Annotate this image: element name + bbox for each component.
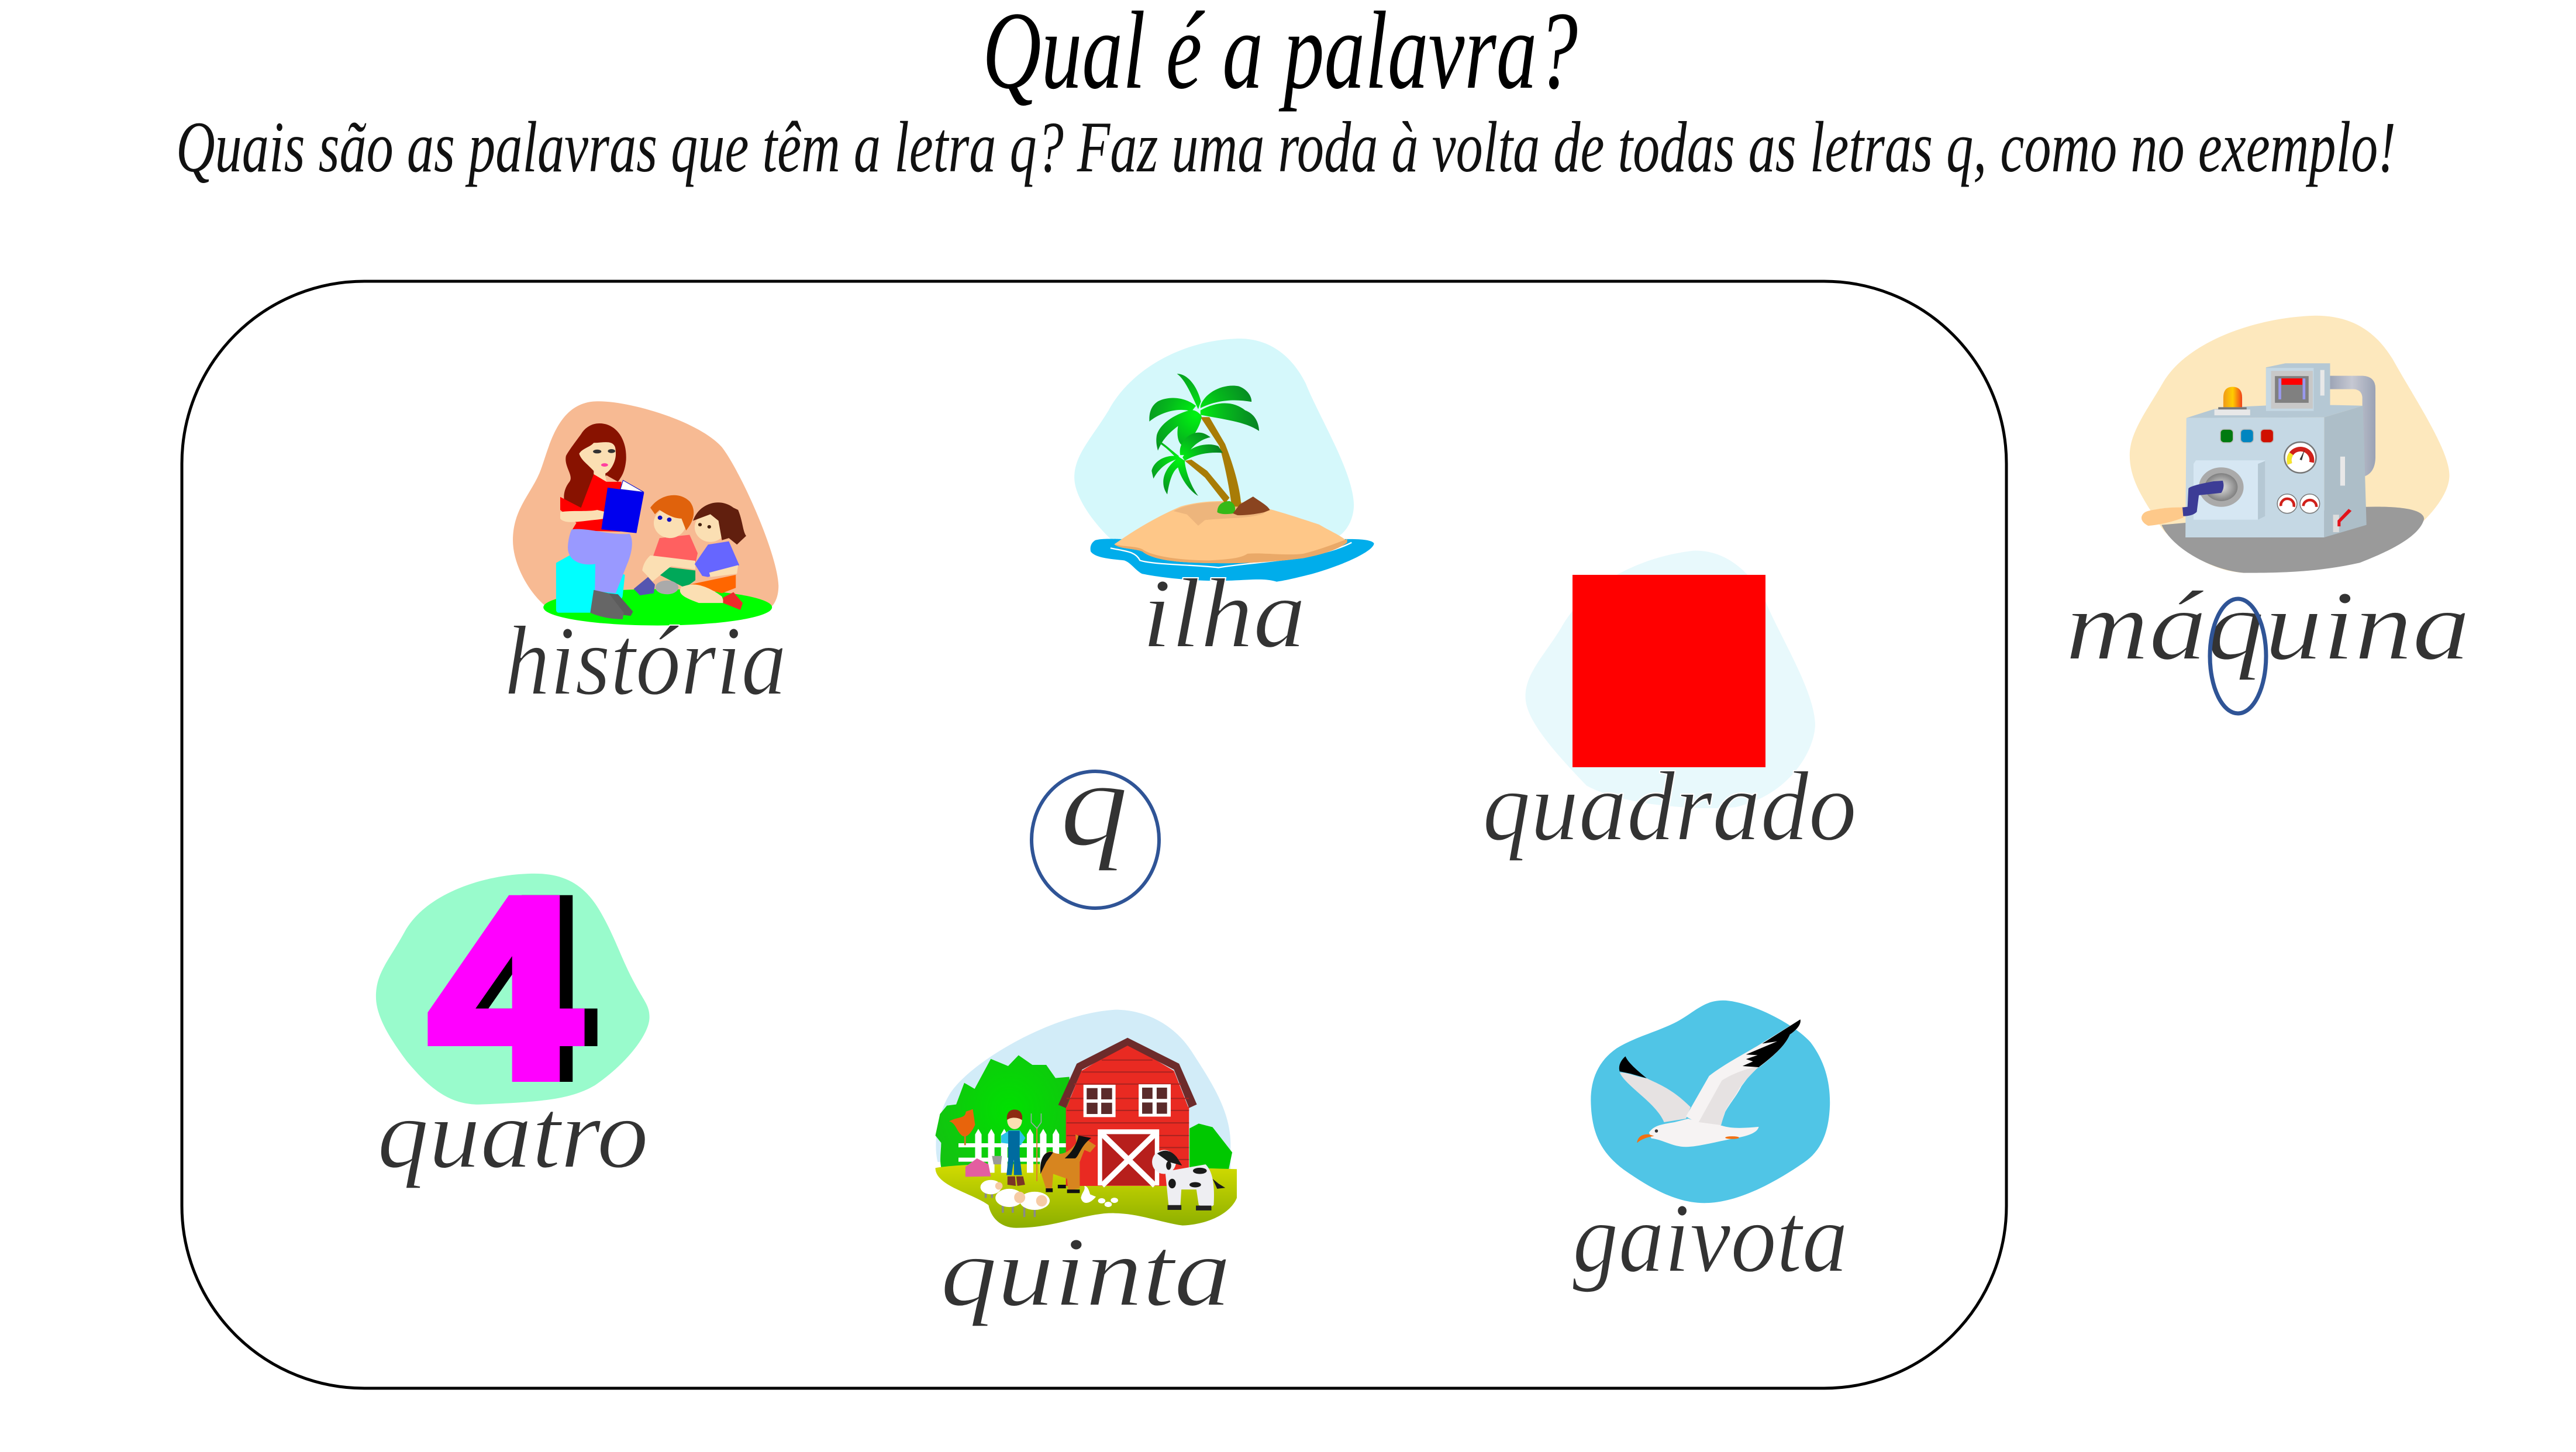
panel: word frame (182, 281, 2006, 1388)
item: ilha (1074, 339, 1374, 668)
word: quatro: quatro (377, 1079, 649, 1189)
centre letter q in circle (1032, 736, 1159, 908)
item: história (505, 401, 787, 716)
example ring around q (2210, 599, 2266, 713)
numeral 4 shadow: 4 (443, 846, 594, 1130)
circle (1032, 771, 1159, 908)
item: quatro (376, 846, 650, 1189)
word: quadrado: quadrado (1482, 751, 1857, 861)
background blob (1526, 551, 1815, 808)
red square (1573, 575, 1765, 767)
item: quadrado (1482, 551, 1857, 861)
word: máquina: máquina (2065, 571, 2470, 681)
word: história: história (505, 606, 787, 716)
illustration: teacher reading to children (513, 401, 778, 626)
word: ilha: ilha (1142, 558, 1306, 668)
illustration: machine (2130, 316, 2449, 573)
illustration: farm with barn (936, 1010, 1237, 1228)
word: quinta: quinta (940, 1217, 1231, 1327)
letter q: q (1060, 736, 1129, 872)
background blob (376, 874, 650, 1105)
item: quinta (936, 1010, 1237, 1327)
example: máquina (2065, 316, 2470, 713)
numeral 4: 4 (430, 846, 581, 1130)
word: gaivota: gaivota (1573, 1183, 1848, 1293)
item: gaivota (1573, 1001, 1848, 1293)
illustration: island with palm trees (1074, 339, 1374, 582)
illustration: seagull (1591, 1001, 1830, 1203)
